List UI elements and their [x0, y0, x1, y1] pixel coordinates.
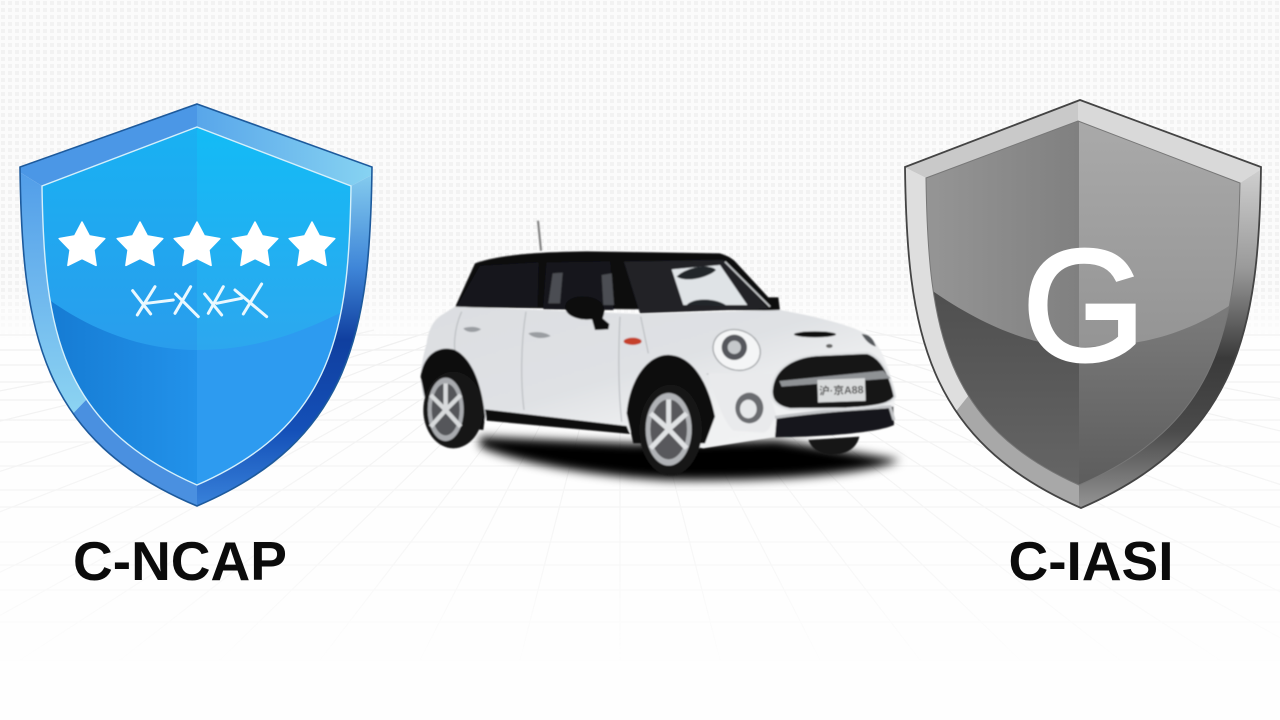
icon: blue C-NCAP shield with five stars — [19, 103, 373, 507]
letter G: G — [1023, 218, 1145, 394]
icon: white Mini hatchback car — [421, 221, 900, 480]
car artwork — [421, 221, 895, 475]
label: C-NCAP: C-NCAP — [73, 530, 287, 592]
front wheel arch and wheel — [627, 355, 715, 475]
grille: 沪·京A88 — [819, 383, 864, 398]
far front wheel — [808, 437, 859, 455]
license plate — [817, 378, 866, 402]
windshield — [624, 260, 768, 313]
rear wheel arch and wheel — [421, 349, 485, 448]
right headlight sliver — [862, 334, 876, 347]
windshield reflection — [672, 265, 747, 305]
headlight — [708, 324, 766, 376]
grille — [772, 353, 895, 409]
front bumper lower section — [708, 373, 777, 433]
door seams and handles — [455, 312, 772, 422]
red side indicator — [624, 338, 642, 345]
ground shadow — [480, 437, 900, 480]
five white stars — [59, 222, 335, 265]
greenhouse and black roof — [455, 251, 780, 311]
fog light — [735, 393, 763, 423]
hood scoop — [794, 331, 836, 337]
scratchy small stars — [133, 284, 267, 317]
antenna — [538, 221, 541, 251]
seat silhouettes — [548, 273, 614, 305]
black sill — [485, 409, 630, 434]
car body — [421, 307, 895, 448]
icon: silver C-IASI shield with letter G — [904, 99, 1262, 509]
label: C-IASI: C-IASI — [1008, 530, 1174, 592]
side mirror — [565, 296, 609, 330]
A pillar highlight — [725, 262, 770, 307]
badge — [826, 344, 833, 348]
side windows — [457, 262, 613, 310]
